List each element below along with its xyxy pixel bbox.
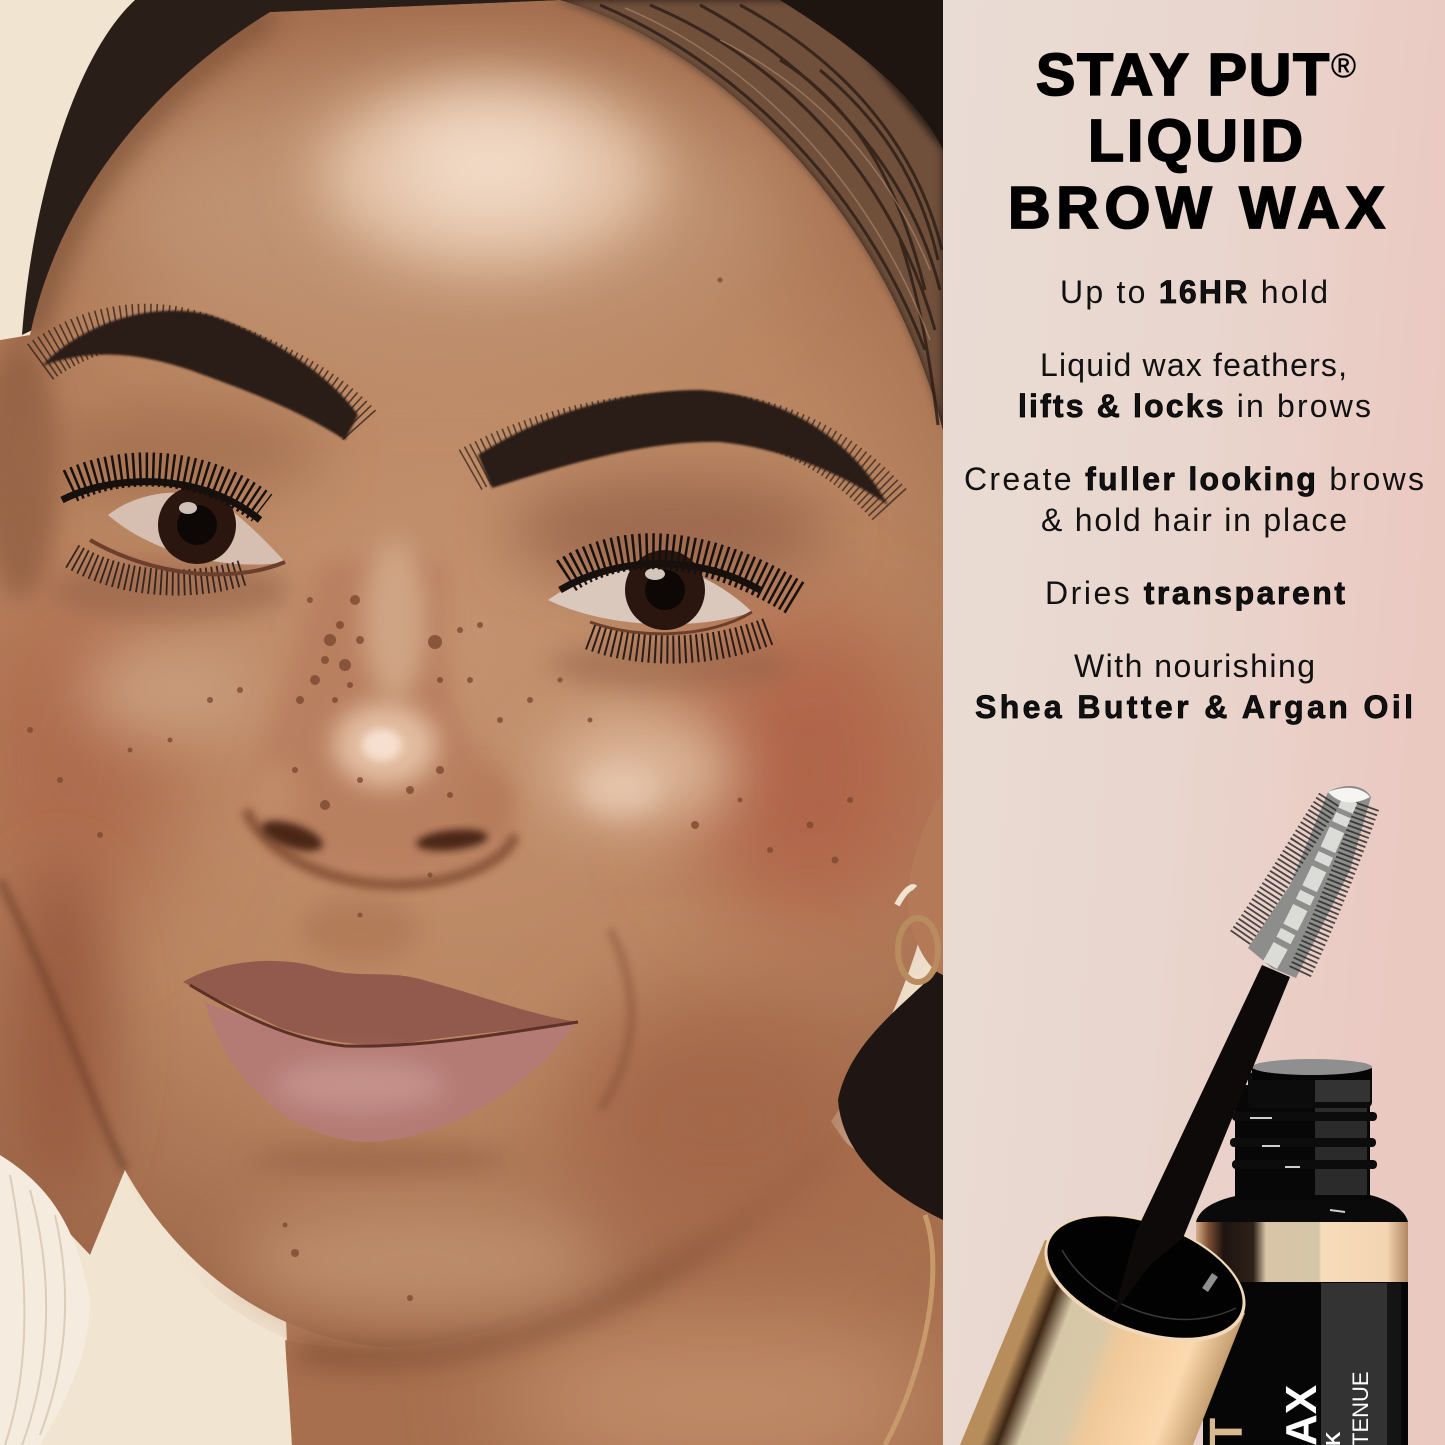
eye: left — [62, 469, 285, 583]
claim: fuller brows — [964, 461, 1424, 538]
philtrum shadow — [306, 901, 414, 958]
title: LIQUID — [1088, 108, 1303, 174]
chin shadow under lip — [250, 1144, 510, 1176]
claim: liquid wax — [1018, 347, 1371, 424]
claim: hold: Up to 16HR hold — [1060, 274, 1328, 310]
claim: liquid wax: lifts & locks in brows — [1018, 388, 1371, 424]
bottle label text: AX — [1277, 1385, 1326, 1445]
upper lip — [183, 961, 578, 1045]
hair: strands on right hairline — [550, 0, 943, 430]
sleeve — [0, 1155, 90, 1445]
bottle neck and threads — [1235, 1085, 1370, 1200]
cheek shading — [690, 610, 930, 930]
bottle label text: TENUE — [1348, 1371, 1373, 1445]
product: bottle — [1196, 1059, 1408, 1445]
background panel — [943, 0, 1445, 1445]
hair: top — [22, 0, 943, 440]
smile line — [600, 930, 631, 1110]
claim: liquid wax: Liquid wax feathers, — [1040, 347, 1347, 383]
claim: ingredients: With nourishing — [1074, 648, 1315, 684]
product: cap — [960, 1189, 1263, 1445]
lip highlight — [275, 1059, 445, 1111]
backdrop — [0, 0, 943, 1445]
bottle gold band — [1196, 1222, 1408, 1282]
cap gold body — [960, 1240, 1245, 1445]
title: STAY PUT — [1036, 42, 1329, 108]
face and hand skin — [0, 0, 943, 1445]
lips — [183, 961, 578, 1142]
eyebrow: left — [40, 311, 362, 440]
jaw shading — [560, 990, 880, 1250]
photo: model portrait — [0, 0, 943, 1445]
bottle opening — [1252, 1059, 1372, 1075]
bottle shoulder — [1196, 1195, 1408, 1222]
freckles — [27, 278, 853, 1301]
title — [1008, 42, 1385, 241]
claim: ingredients: Shea Butter & Argan Oil — [975, 689, 1413, 725]
mouth line — [190, 985, 578, 1046]
eye: right — [548, 550, 795, 650]
ear and earring — [897, 790, 943, 982]
lower lip — [205, 1002, 575, 1142]
bottle label text — [1277, 1371, 1373, 1445]
temple shadow and hand edge — [0, 340, 60, 600]
nose — [266, 562, 492, 872]
skin base — [0, 0, 943, 1348]
neck — [285, 1120, 943, 1445]
bottle body — [1203, 1280, 1408, 1445]
necklace — [885, 1215, 933, 1445]
product: wand — [1113, 965, 1290, 1315]
forehead tone and highlight — [100, 80, 780, 340]
title: ® — [1331, 47, 1356, 85]
eyebrow: right — [470, 390, 890, 505]
eye sockets — [25, 405, 325, 495]
hair: lower right — [838, 965, 943, 1220]
claim: transparent: Dries transparent — [1045, 575, 1345, 611]
claim: ingredients — [975, 648, 1413, 725]
product: spoolie brush — [1240, 786, 1371, 978]
cap rim and opening — [1027, 1189, 1263, 1367]
title: BROW WAX — [1008, 175, 1385, 241]
claim: fuller brows: Create fuller looking brows — [964, 461, 1424, 497]
neck shadow — [285, 1143, 870, 1444]
claim: fuller brows: & hold hair in place — [1041, 502, 1347, 538]
